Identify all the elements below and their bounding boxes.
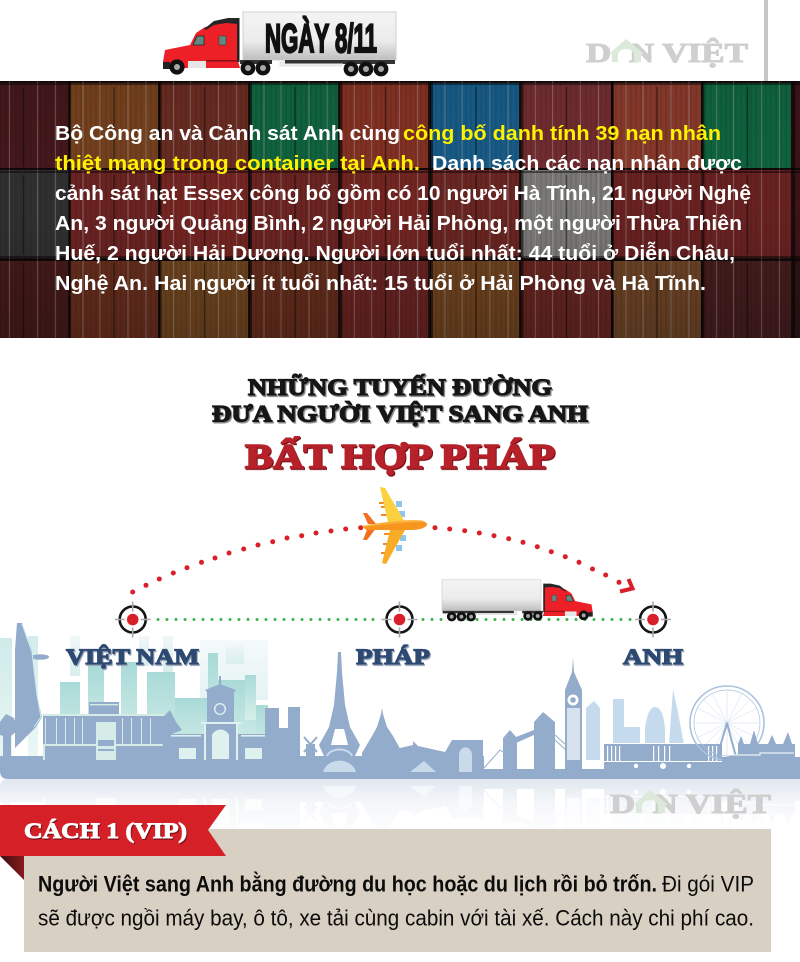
Eiffel tower <box>319 652 360 756</box>
icon: red truck with date <box>163 12 396 76</box>
market building <box>172 722 265 760</box>
logo: Dân Việt top: D N VIỆT <box>586 38 748 68</box>
skyline <box>0 623 800 779</box>
domed building <box>362 708 402 758</box>
Paris-London low skyline <box>400 740 483 769</box>
pale skyscrapers <box>586 689 684 760</box>
route: road dotted line <box>156 618 632 621</box>
method description: Người Việt sang Anh bằng đường du học hoặc du lịch rồi bỏ trốn. <box>38 872 657 896</box>
Bitexco tower <box>15 623 42 748</box>
method description: sẽ được ngồi máy bay, ô tô, xe tải cùng cabin với tài xế. Cách này chi phí cao. <box>38 906 754 930</box>
Notre Dame <box>265 707 300 756</box>
logo: Dân Việt bottom: D N VIỆT <box>610 789 771 819</box>
label: Việt Nam: VIỆT NAM <box>66 644 199 669</box>
right buildings <box>722 730 800 772</box>
marker: Anh <box>635 602 671 638</box>
route: flight dotted arc <box>130 525 632 594</box>
summary text: Bộ Công an và Cảnh sát Anh cùng <box>55 122 400 145</box>
summary text: Huế, 2 người Hải Dương. Người lớn tuổi nhất: 44 tuổi ở Diễn Châu, <box>55 241 735 265</box>
ground band <box>0 756 800 779</box>
top divider bar <box>764 0 768 81</box>
summary text <box>55 122 751 295</box>
summary text: thiệt mạng trong container tại Anh. <box>55 152 420 175</box>
Tower Bridge <box>503 730 517 772</box>
marker: Việt Nam <box>115 602 151 638</box>
ribbon: method heading: CÁCH 1 (VIP) <box>24 818 187 843</box>
icon: airplane <box>362 487 427 564</box>
skyline reflection <box>0 779 800 812</box>
date label: NGÀY 8/11 <box>265 16 377 61</box>
summary text: Danh sách các nạn nhân được <box>432 152 742 175</box>
tree right of hall <box>160 710 182 756</box>
method description: Đi gói VIP <box>662 872 754 896</box>
summary text: công bố danh tính 39 nạn nhân <box>403 122 721 145</box>
method description <box>38 872 754 930</box>
title <box>212 374 588 476</box>
summary text: cảnh sát hạt Essex công bố gồm có 10 người Hà Tĩnh, 21 người Nghệ <box>55 182 751 205</box>
summary text: An, 3 người Quảng Bình, 2 người Hải Phòng, một người Thừa Thiên <box>55 212 742 235</box>
London Eye <box>690 686 764 760</box>
container wall background <box>0 81 800 338</box>
ribbon fold <box>0 856 24 880</box>
icon: road truck <box>442 580 593 621</box>
long hall <box>43 714 165 760</box>
panel: container photo with summary <box>0 81 800 338</box>
title: BẤT HỢP PHÁP <box>245 436 555 476</box>
panel: method 1 <box>24 829 771 952</box>
palm tree <box>0 714 18 756</box>
arrowhead <box>620 579 632 592</box>
label: Pháp: PHÁP <box>356 644 430 669</box>
skyline background squares <box>0 636 268 760</box>
label: Anh: ANH <box>623 644 684 669</box>
marker: Pháp <box>382 602 418 638</box>
summary text: Nghệ An. Hai người ít tuổi nhất: 15 tuổi ở Hải Phòng và Hà Tĩnh. <box>55 272 706 295</box>
Big Ben <box>565 658 582 770</box>
windmill <box>304 737 317 752</box>
ribbon: method heading <box>0 805 226 856</box>
palace <box>604 743 722 770</box>
title: NHỮNG TUYẾN ĐƯỜNG <box>248 374 552 400</box>
title: ĐƯA NGƯỜI VIỆT SANG ANH <box>212 400 588 426</box>
small ground windows <box>634 763 691 769</box>
